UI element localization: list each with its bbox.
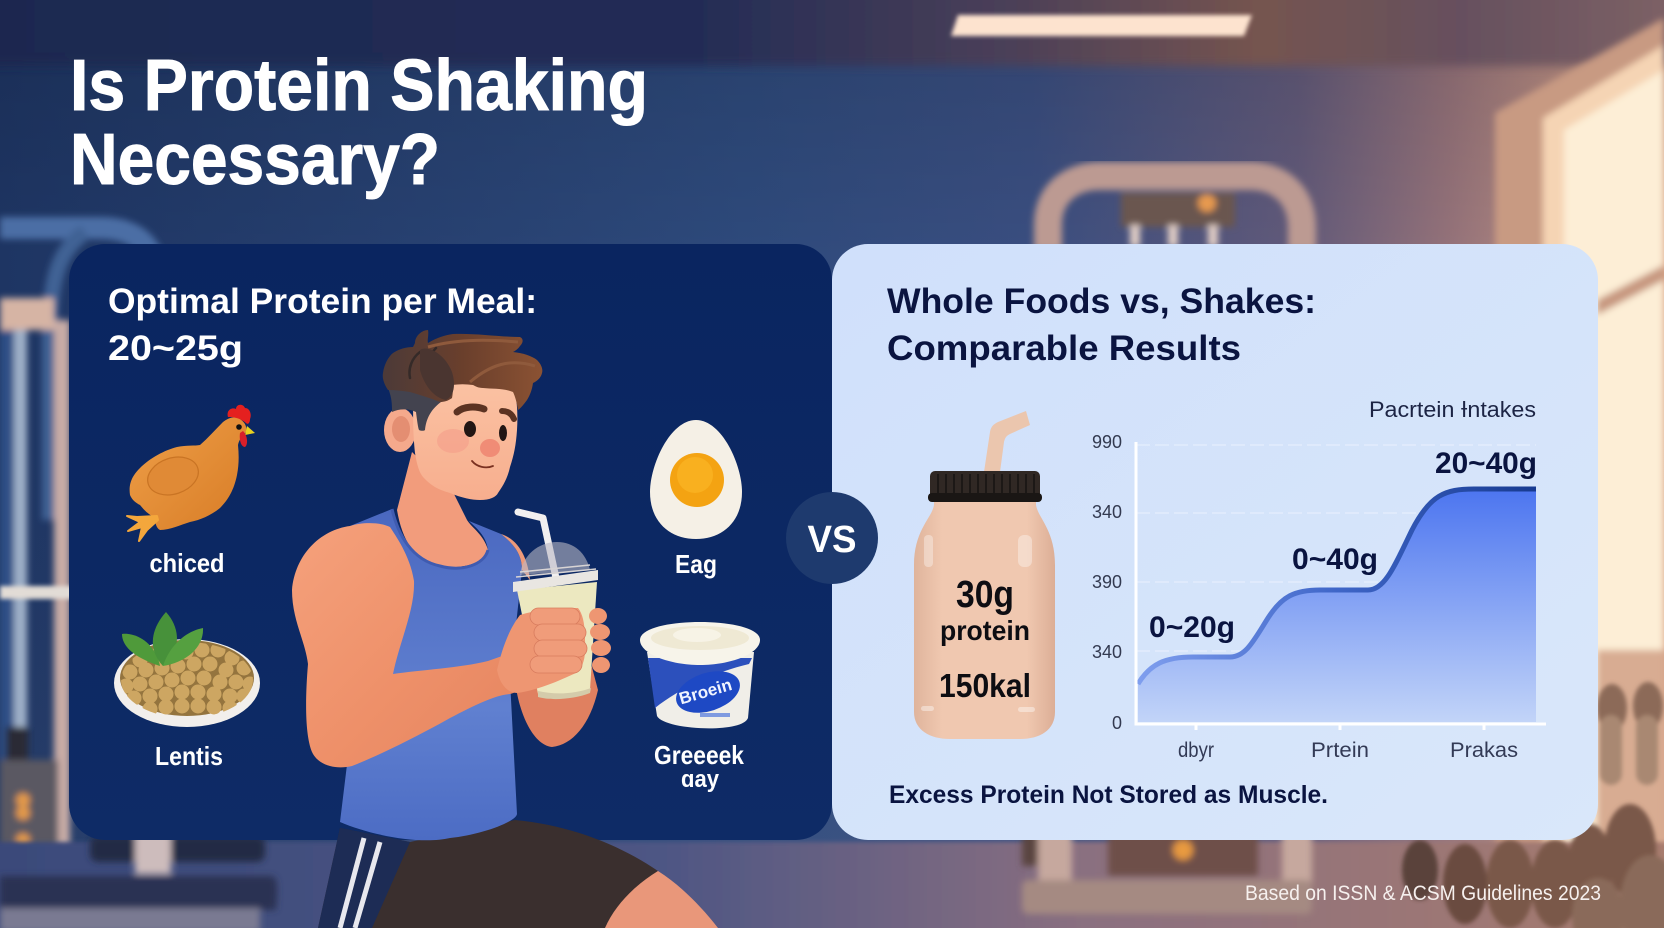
shorts [318, 820, 658, 928]
y axis labels [1092, 432, 1122, 733]
brows [457, 407, 484, 412]
shake cup [513, 512, 598, 699]
icon: lentils bowl [114, 612, 260, 727]
y axis labels: 340 [1092, 502, 1122, 522]
lower center machine [1022, 832, 1312, 914]
bottle label: 150kal [939, 667, 1031, 704]
panel: optimal protein per meal [69, 244, 832, 840]
label: greek yogurt: Greeeek [654, 740, 744, 770]
hair [383, 330, 542, 410]
label: greek yogurt [654, 740, 744, 793]
label: egg: Eag [675, 549, 717, 579]
chart title: Pacrtein Ɨntakes [1369, 397, 1536, 422]
center machine [1048, 176, 1302, 250]
bottle label [939, 574, 1031, 704]
y axis labels: 0 [1112, 713, 1122, 733]
label: greek yogurt: ɑay [681, 766, 720, 793]
ear [384, 408, 416, 452]
axes [1136, 442, 1546, 730]
bottle label: protein [940, 615, 1030, 646]
panel: whole foods vs shakes [832, 244, 1598, 840]
title: Is Protein Shaking [70, 46, 648, 126]
title: Necessary? [70, 120, 440, 200]
panel heading [108, 282, 537, 368]
icon: greek yogurt cup [640, 622, 760, 728]
title [70, 46, 648, 200]
curve [1138, 489, 1536, 684]
barbell [0, 539, 146, 637]
bottle label: 30g [956, 574, 1014, 616]
hand [497, 608, 611, 693]
source note: Based on ISSN & ACSM Guidelines 2023 [1245, 882, 1601, 905]
panel heading [887, 282, 1316, 368]
data labels [1149, 447, 1537, 644]
neck [397, 452, 488, 567]
data labels: 0~20g [1149, 611, 1235, 644]
panel heading: 20~25g [108, 329, 243, 368]
area fill [1138, 489, 1536, 722]
x axis labels: Prtein [1311, 739, 1369, 762]
gridlines [1136, 445, 1536, 651]
y axis labels: 390 [1092, 572, 1122, 592]
vs badge: VS [808, 519, 856, 561]
label: lentils: Lentis [155, 741, 223, 771]
window and frame [1495, 18, 1664, 850]
floor [0, 842, 1664, 928]
head [383, 330, 542, 500]
label: chicken: chiced [150, 548, 224, 578]
character: man with protein shake [292, 330, 718, 928]
leg [605, 871, 718, 928]
panel heading: Whole Foods vs, Shakes: [887, 282, 1316, 321]
note: Excess Protein Not Stored as Muscle. [889, 781, 1328, 809]
panel heading: Comparable Results [887, 329, 1241, 368]
vs badge [786, 492, 878, 584]
bench [0, 832, 277, 928]
y axis labels: 340 [1092, 642, 1122, 662]
x axis labels [1178, 739, 1518, 762]
face [413, 375, 517, 500]
ceiling light [951, 15, 1252, 36]
y axis labels: 990 [1092, 432, 1122, 452]
far forearm [515, 660, 598, 747]
nose [480, 439, 500, 457]
left rack [0, 228, 154, 880]
data labels: 0~40g [1292, 543, 1378, 576]
icon: shake bottle [914, 411, 1055, 739]
eyes [464, 421, 476, 437]
ceiling [0, 0, 1664, 66]
icon: egg [650, 420, 742, 539]
near arm [292, 523, 526, 767]
mouth [472, 461, 493, 467]
area chart [1092, 432, 1546, 762]
hair side [388, 375, 452, 431]
x axis labels: dbyr [1178, 739, 1214, 762]
data labels: 20~40g [1435, 447, 1537, 480]
icon: greek yogurt cup: Broein [677, 675, 734, 708]
icon: chicken [127, 405, 255, 541]
x axis labels: Prakas [1450, 739, 1518, 762]
tank top [340, 509, 522, 840]
panel heading: Optimal Protein per Meal: [108, 282, 537, 321]
dumbbells [1402, 682, 1664, 928]
